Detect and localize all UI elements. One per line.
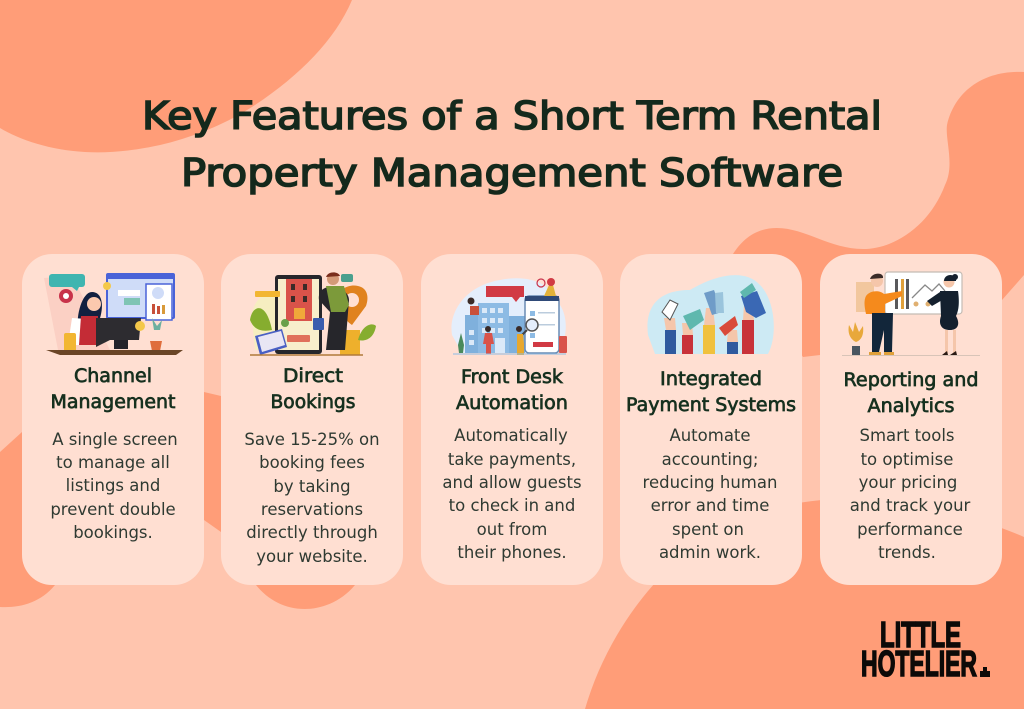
text block: and track your (850, 496, 971, 515)
heading: Channel (74, 366, 152, 387)
text block: admin work. (659, 543, 761, 562)
icon: hotel building with phone and guests (451, 278, 567, 355)
text block: accounting; (662, 450, 758, 469)
text block: prevent double (50, 500, 176, 519)
text block (850, 426, 971, 562)
text block: to manage all (56, 453, 170, 472)
icon: raised hands holding phone, cards and payment terminal (647, 275, 774, 354)
text block: listings and (66, 476, 160, 495)
heading (456, 367, 568, 414)
panel: reporting and analytics (820, 254, 1002, 585)
icon: woman at desk with computer and browser windows (44, 273, 183, 355)
text block (50, 430, 178, 542)
text block: Smart tools (860, 426, 954, 445)
text block: to check in and (449, 496, 575, 515)
text block (442, 426, 582, 562)
title: Key Features of a Short Term Rental (142, 94, 882, 138)
heading: Payment Systems (626, 395, 796, 416)
heading: Automation (456, 393, 568, 414)
text block: A single screen (52, 430, 178, 449)
heading: Direct (283, 366, 343, 387)
heading: Front Desk (461, 367, 563, 388)
text block (643, 426, 777, 562)
panel: front desk automation (421, 254, 603, 585)
logo: Little Hotelier: LITTLE (880, 614, 961, 655)
text block: your website. (256, 547, 368, 566)
icon: two presenters with chart board (842, 272, 980, 356)
heading: Management (50, 392, 176, 413)
text block: Automate (669, 426, 751, 445)
text block: spent on (672, 520, 744, 539)
text block: Automatically (454, 426, 568, 445)
text block: reservations (261, 500, 363, 519)
text block: directly through (246, 523, 378, 542)
panel: integrated payment systems (620, 254, 802, 585)
text block: bookings. (73, 523, 153, 542)
icon: phone with hotel, person and location pin (250, 272, 376, 355)
text block: performance (857, 520, 963, 539)
heading (270, 366, 356, 413)
text block: their phones. (457, 543, 567, 562)
heading (50, 366, 176, 413)
heading: Integrated (660, 369, 762, 390)
title: Property Management Software (181, 151, 843, 195)
text block: trends. (878, 543, 936, 562)
text block: error and time (651, 496, 769, 515)
text block: reducing human (643, 473, 777, 492)
panel: channel management (22, 254, 204, 585)
text block: to optimise (861, 450, 953, 469)
text block: and allow guests (442, 473, 582, 492)
logo: Little Hotelier (861, 614, 990, 684)
heading (844, 370, 978, 417)
heading: Analytics (868, 396, 954, 417)
text block: Save 15-25% on (244, 430, 380, 449)
heading: Bookings (270, 392, 356, 413)
text block (244, 430, 380, 566)
text block: booking fees (259, 453, 365, 472)
text block: your pricing (859, 473, 957, 492)
text block: out from (477, 520, 547, 539)
title (142, 94, 882, 195)
text block: take payments, (448, 450, 576, 469)
heading (626, 369, 796, 416)
heading: Reporting and (844, 370, 978, 391)
text block: by taking (273, 477, 351, 496)
panel: direct bookings (221, 254, 403, 585)
